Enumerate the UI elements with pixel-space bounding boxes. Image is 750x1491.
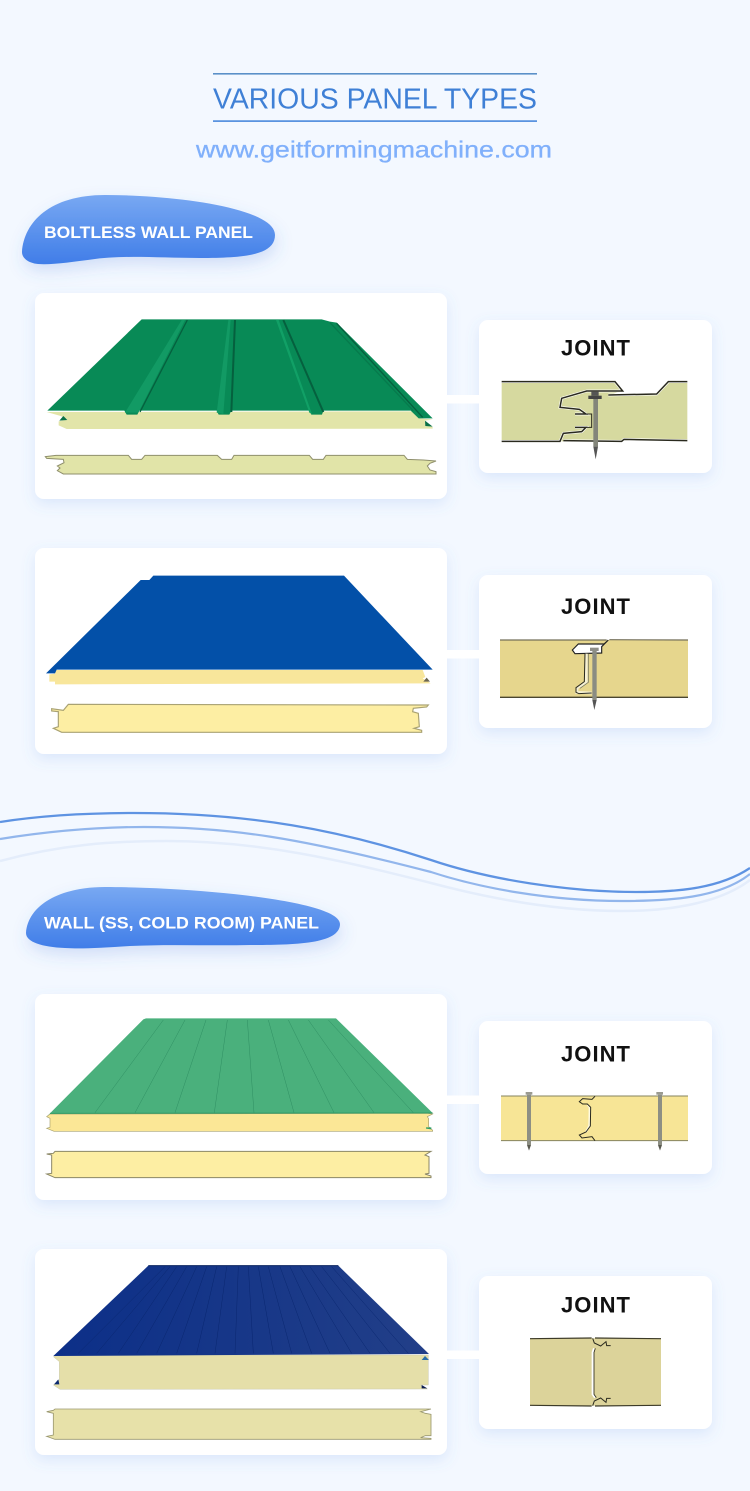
panel illustration: blue flat panel (46, 576, 433, 732)
panel cross-section (47, 1151, 431, 1178)
joint diagram: blue (500, 640, 688, 710)
panel card 3: green cold room panel (35, 994, 447, 1200)
panel cross-section (52, 704, 428, 732)
joint card 1 (479, 320, 712, 473)
panel cross-section (45, 455, 436, 474)
joint card 3 (479, 1021, 712, 1174)
section label: boltless wall panel (22, 195, 275, 264)
panel card 1: green boltless wall panel (35, 293, 447, 499)
decorative waves (0, 813, 750, 911)
title: VARIOUS PANEL TYPES (213, 83, 537, 115)
joint heading: JOINT (561, 1293, 631, 1318)
website url: www.geitformingmachine.com (195, 136, 552, 162)
section label: wall (ss, cold room) panel (26, 887, 340, 948)
section label: wall (ss, cold room) panel: WALL (SS, COLD ROOM) PANEL (44, 913, 319, 932)
panel cross-section (47, 1409, 431, 1439)
panel illustration: navy lined panel (47, 1266, 431, 1439)
joint heading: JOINT (561, 594, 631, 619)
section label: boltless wall panel: BOLTLESS WALL PANEL (44, 223, 253, 242)
panel card 2: blue flat panel (35, 548, 447, 754)
joint card 2 (479, 575, 712, 728)
screw (590, 648, 599, 710)
joint heading: JOINT (561, 1042, 631, 1067)
joint diagram: green cold room (501, 1092, 688, 1151)
joint diagram: boltless green (502, 382, 687, 459)
joint heading: JOINT (561, 336, 631, 361)
panel illustration: green ribbed panel (45, 319, 436, 474)
panel illustration: green lined panel (47, 1018, 433, 1178)
connector bars between cards (447, 395, 479, 1359)
panel card 4: navy cold room panel (35, 1249, 447, 1455)
joint card 4 (479, 1276, 712, 1429)
screws (526, 1092, 663, 1151)
joint diagram: navy cold room (530, 1338, 661, 1406)
screw (588, 392, 602, 459)
